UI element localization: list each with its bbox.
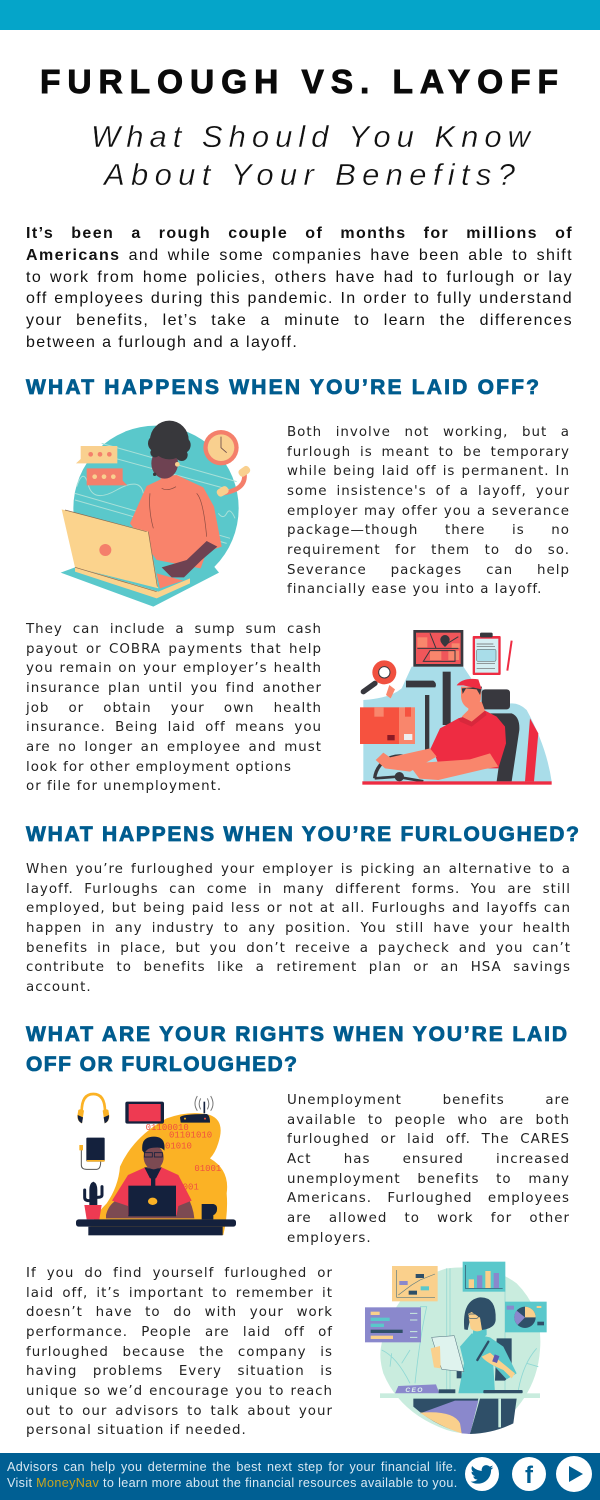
text block: advisors advice: having problems Every situation is: [26, 1364, 333, 1379]
heading: rights: WHAT ARE YOUR RIGHTS WHEN YOU’RE LAID: [26, 1023, 567, 1046]
text block: unemployment benefits: available to people who are both: [287, 1113, 570, 1128]
title: FURLOUGH VS. LAYOFF: [40, 64, 558, 101]
heading: rights: [26, 1023, 567, 1076]
illustration: man at laptop with devices: 01101010: [169, 1131, 212, 1141]
intro paragraph: It’s been a rough couple of months for millions of: [26, 225, 573, 242]
text block: COBRA payments: look for other employment options: [26, 760, 292, 775]
subtitle: [91, 119, 533, 192]
icon: facebook: f: [525, 1462, 534, 1489]
subtitle: About Your Benefits?: [102, 157, 516, 192]
text block: both involve not working: financially ease you into a layoff.: [287, 582, 542, 597]
text block: unemployment benefits: Americans. Furloughed employees: [287, 1191, 570, 1206]
text block: both involve not working: package—though there is no: [287, 523, 570, 538]
text block: COBRA payments: insurance. Being laid off means you: [26, 720, 322, 735]
text block: COBRA payments: They can include a sump sum cash: [26, 622, 322, 637]
illustration: delivery driver: [360, 630, 552, 785]
illustration: man at laptop with devices: 01001: [194, 1164, 221, 1174]
text block: COBRA payments: insurance plan until you find another: [26, 681, 322, 696]
text block: furlough explanation: [26, 862, 571, 995]
text block: advisors advice: out to our advisors to talk about your: [26, 1404, 333, 1419]
text block: unemployment benefits: [287, 1093, 570, 1246]
footer text: Advisors can help you determine the best next step for your financial life.: [7, 1460, 457, 1474]
text block: both involve not working: requirement for them to do so.: [287, 543, 570, 558]
icon: twitter: [465, 1457, 499, 1491]
text block: advisors advice: [26, 1266, 333, 1438]
intro paragraph: to work from home policies, others have had to furlough or lay: [26, 268, 573, 286]
text block: COBRA payments: or file for unemployment.: [26, 779, 222, 794]
heading: laid off: WHAT HAPPENS WHEN YOU’RE LAID OFF?: [26, 376, 539, 399]
illustration: woman at laptop with headset: [61, 421, 252, 607]
text block: advisors advice: personal situation if needed.: [26, 1423, 247, 1438]
text block: both involve not working: furlough is meant to be temporary: [287, 445, 570, 460]
text block: advisors advice: If you do find yourself furloughed or: [26, 1266, 333, 1281]
illustration: CEO reviewing charts: [365, 1262, 547, 1434]
text block: unemployment benefits: are allowed to work for other: [287, 1211, 570, 1226]
intro paragraph: [26, 225, 573, 351]
text block: COBRA payments: job or obtain your own health: [26, 701, 322, 716]
text block: furlough explanation: employed, but being paid less or not at all. Furloughs and layoffs can: [26, 901, 571, 916]
text block: unemployment benefits: furloughed or laid off. The CARES: [287, 1132, 570, 1147]
footer text: Visit MoneyNav to learn more about the financial resources available to you.: [7, 1476, 458, 1490]
text block: advisors advice: performance. People are laid off of: [26, 1325, 333, 1340]
illustration: man at laptop with devices: 001: [183, 1183, 199, 1193]
icon: play: [556, 1456, 592, 1492]
text block: COBRA payments: [26, 622, 322, 794]
text block: furlough explanation: benefits in place, but you don’t receive a paycheck and you can’t: [26, 941, 571, 956]
text block: both involve not working: [287, 425, 570, 597]
text block: advisors advice: laid off, it’s important to remember it: [26, 1286, 333, 1301]
heading: furloughed: WHAT HAPPENS WHEN YOU’RE FURLOUGHED?: [26, 823, 579, 846]
text block: both involve not working: some insistence's of a layoff, your: [287, 484, 570, 499]
top banner: [0, 0, 600, 30]
text block: both involve not working: employer may offer you a severance: [287, 504, 570, 519]
text block: furlough explanation: layoff. Furloughs can come in many different forms. You are still: [26, 882, 571, 897]
text block: furlough explanation: account.: [26, 980, 92, 995]
footer band: [0, 1453, 600, 1500]
illustration: CEO reviewing charts: CEO: [405, 1387, 424, 1394]
text block: both involve not working: Severance packages can help: [287, 563, 570, 578]
text block: COBRA payments: payout or COBRA payments that help: [26, 642, 322, 657]
text block: furlough explanation: contribute to benefits like a retirement plan or an HSA savings: [26, 960, 571, 975]
text block: unemployment benefits: employers.: [287, 1231, 372, 1246]
subtitle: What Should You Know: [91, 119, 533, 154]
text block: both involve not working: Both involve not working, but a: [287, 425, 570, 440]
footer text: [7, 1460, 458, 1490]
intro paragraph: off employees during this pandemic. In order to fully understand: [26, 290, 573, 307]
text block: furlough explanation: happen in any industry to any position. You still have your health: [26, 921, 571, 936]
illustration: man at laptop with devices: [76, 1094, 236, 1235]
text block: unemployment benefits: Act has ensured increased: [287, 1152, 570, 1167]
text block: COBRA payments: you remain on your employer’s health: [26, 661, 322, 676]
intro paragraph: your benefits, let’s take a minute to learn the differences: [26, 312, 573, 329]
text block: unemployment benefits: unemployment benefits to many: [287, 1172, 570, 1187]
text block: advisors advice: doesn’t have to do with your work: [26, 1305, 333, 1320]
illustration: man at laptop with devices: 01010: [165, 1142, 192, 1152]
text block: advisors advice: furloughed because the company is: [26, 1345, 333, 1360]
text block: both involve not working: while being laid off is permanent. In: [287, 464, 570, 479]
text block: COBRA payments: are no longer an employee and must: [26, 740, 322, 755]
intro paragraph: between a furlough and a layoff.: [26, 334, 298, 351]
intro paragraph: Americans and while some companies have been able to shift: [26, 247, 573, 264]
heading: rights: OFF OR FURLOUGHED?: [26, 1053, 297, 1076]
text block: furlough explanation: When you’re furloughed your employer is picking an alternative to a: [26, 862, 571, 877]
text block: unemployment benefits: Unemployment benefits are: [287, 1093, 570, 1108]
text block: advisors advice: unique so we’d encourage you to reach: [26, 1384, 333, 1399]
illustration: man at laptop with devices: 01100010: [146, 1123, 189, 1133]
icon: facebook: [512, 1457, 546, 1491]
